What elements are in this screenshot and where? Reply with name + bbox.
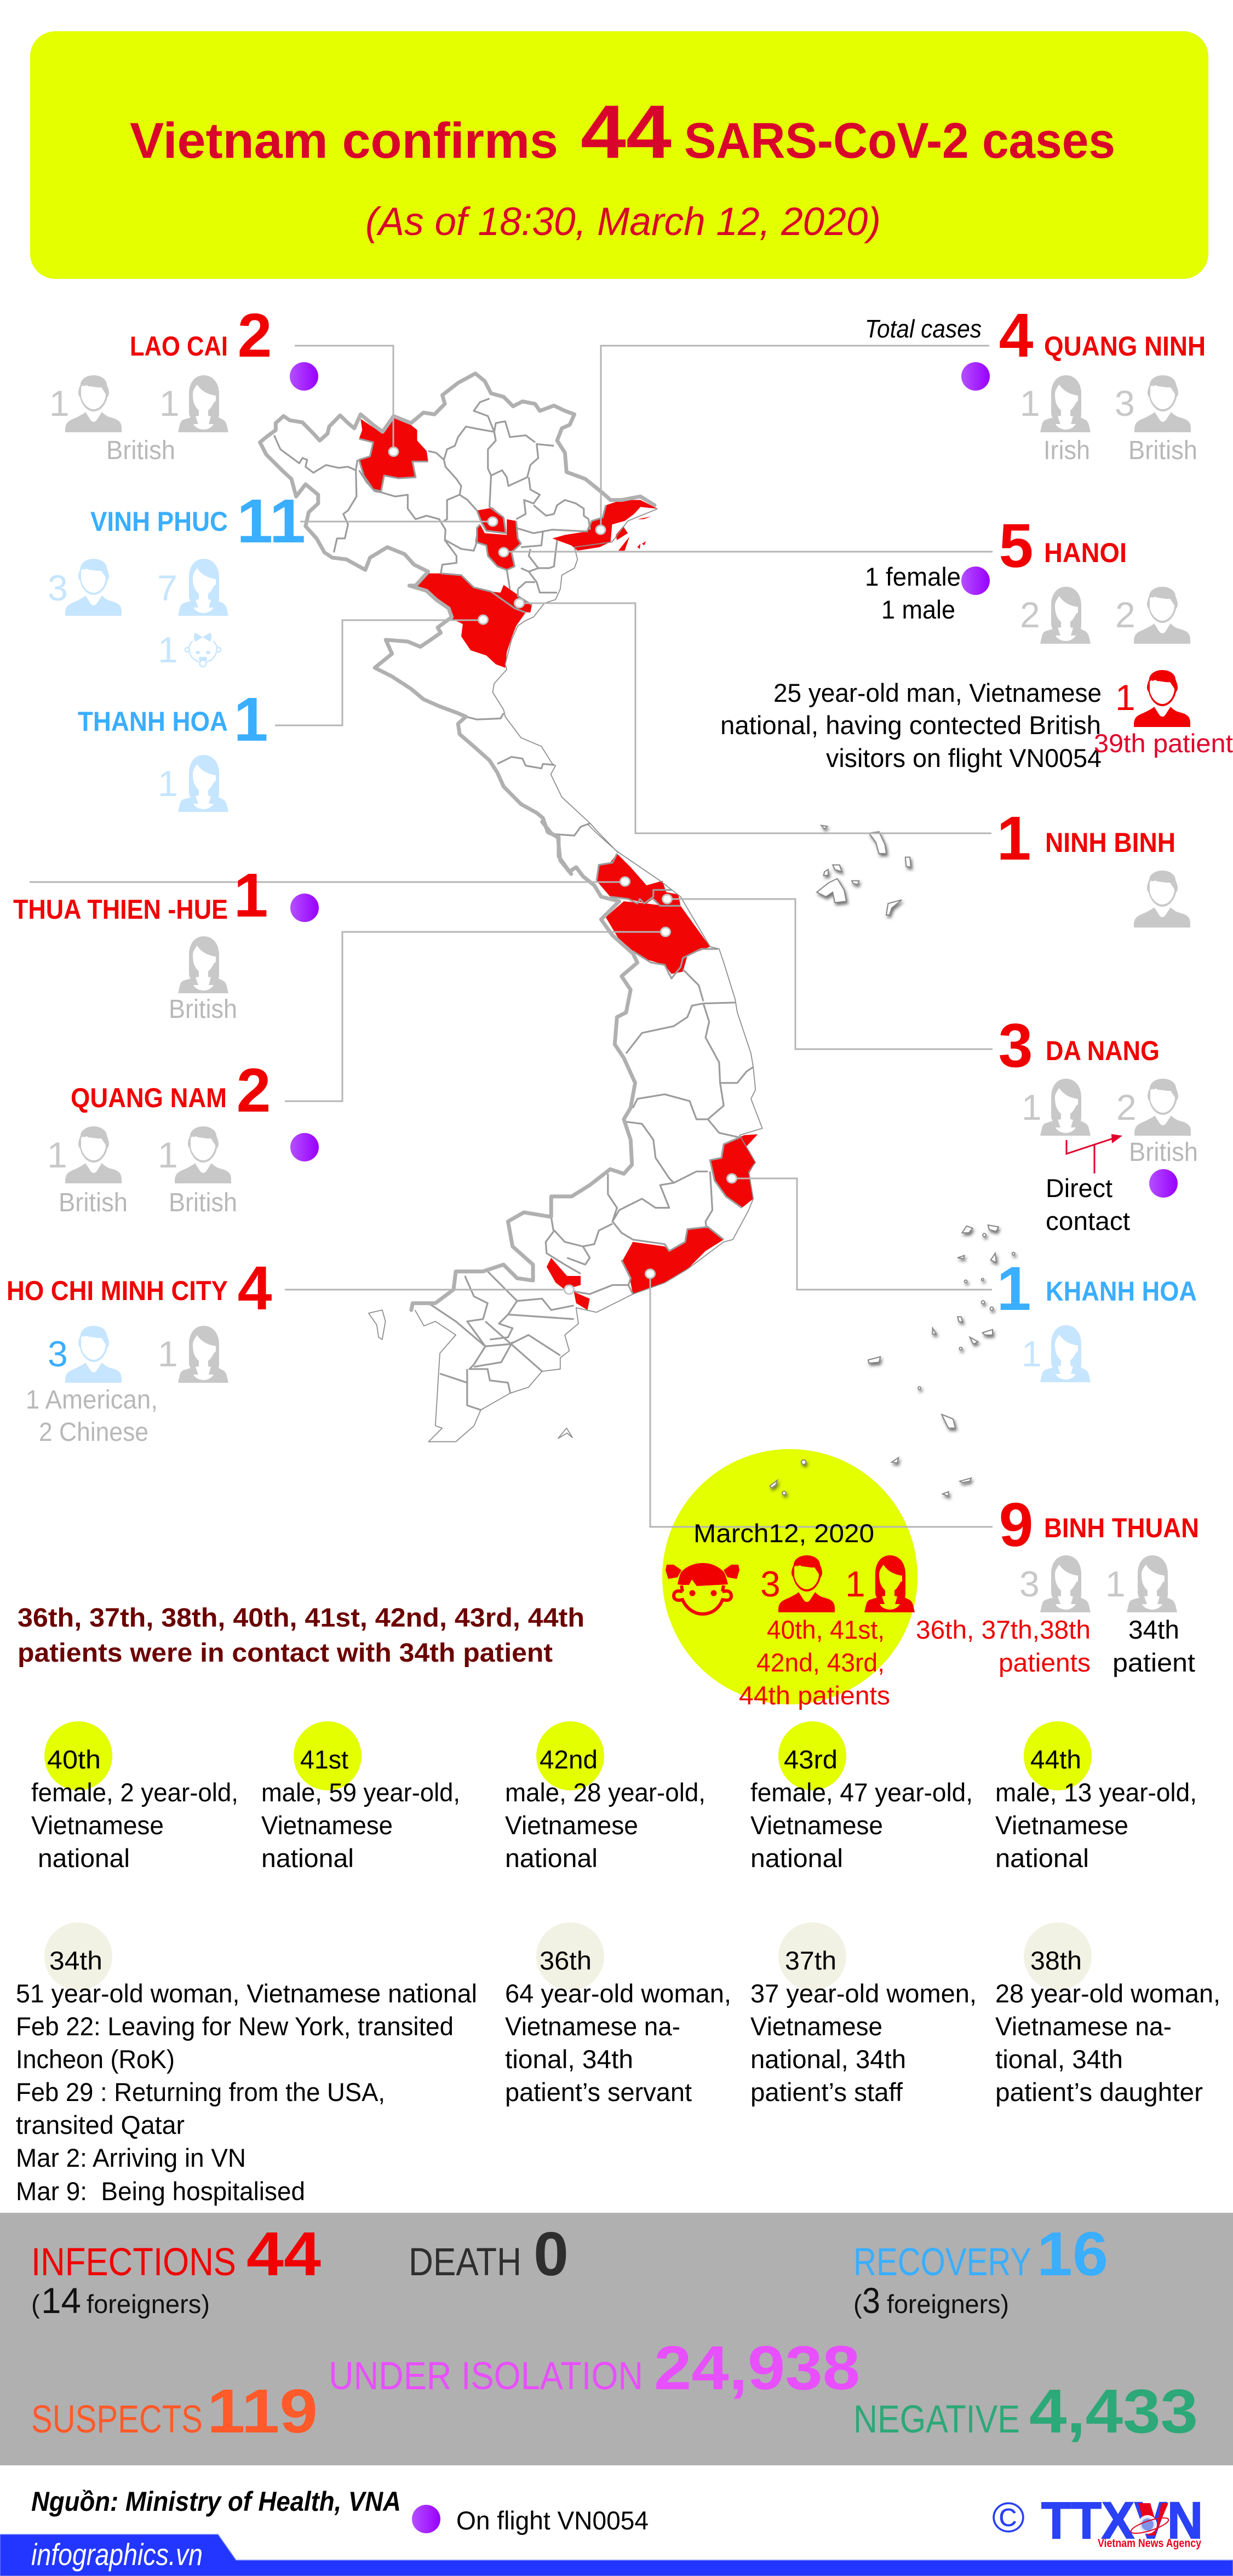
- southern land border: [411, 822, 638, 1310]
- panel: Khanh Hoa: [997, 1254, 1197, 1382]
- panel: Vinh Phuc: VINH PHUC: [90, 506, 228, 537]
- 38th patient: patient’s daughter: [995, 2077, 1203, 2106]
- negative: NEGATIVE: [853, 2398, 1020, 2441]
- panel: Ho Chi Minh City: HO CHI MINH CITY: [7, 1275, 228, 1306]
- deaths: [409, 2219, 569, 2288]
- date in circle: March12, 2020: [693, 1519, 874, 1548]
- 34th patient: Mar 2: Arriving in VN: [16, 2143, 246, 2172]
- title: Vietnam confirms: [130, 113, 558, 169]
- under isolation: [329, 2333, 860, 2402]
- panel: Quang Nam: QUANG NAM: [71, 1083, 227, 1113]
- flight marker: [961, 362, 990, 391]
- case count: 2: [238, 301, 272, 370]
- 37th patient: 37th: [785, 1946, 836, 1975]
- 39th patient icon: 1: [1115, 677, 1135, 718]
- flight marker: [961, 566, 990, 595]
- case count: 4: [999, 301, 1034, 370]
- 38th patient: 38th: [1030, 1946, 1082, 1975]
- 36th patient: [505, 1922, 731, 2106]
- northern provincial borders: [274, 399, 606, 835]
- suspects: SUSPECTS: [31, 2398, 203, 2441]
- under isolation: 24,938: [654, 2333, 860, 2402]
- 38th patient: Vietnamese na-: [995, 2012, 1172, 2041]
- logo: TTXVN Vietnam News Agency: Vietnam News Agency: [1098, 2537, 1201, 2550]
- panel: Thua Thien-Hue: [13, 861, 319, 1024]
- infections: 44: [246, 2219, 321, 2288]
- panel: Binh Thuan: 9: [999, 1490, 1033, 1559]
- southern map: [369, 822, 1015, 1496]
- panel: Khanh Hoa: 1: [997, 1254, 1031, 1323]
- flight marker: [290, 362, 318, 391]
- patient icons: [1022, 1079, 1191, 1136]
- red patient labels: [739, 1615, 1091, 1710]
- direct contact label: Direct: [1046, 1173, 1112, 1203]
- panel: Thua Thien-Hue: THUA THIEN -HUE: [13, 894, 228, 925]
- 43rd patient: [750, 1721, 973, 1873]
- suspects: 119: [207, 2377, 318, 2446]
- nationalities: 1 American,: [26, 1386, 158, 1415]
- footer band: [0, 2534, 1233, 2576]
- 41st patient: national: [261, 1844, 354, 1873]
- region name: DA NANG: [1046, 1035, 1160, 1066]
- red patient icons: 1: [845, 1564, 865, 1604]
- 36th patient: patient’s servant: [505, 2077, 692, 2106]
- Hoang Sa and Truong Sa archipelagos: [770, 826, 1015, 1496]
- 43rd patient: national: [750, 1844, 843, 1873]
- nationality: British: [1129, 1138, 1198, 1167]
- southern provincial borders: [428, 854, 753, 1410]
- gray patient icons: 3: [1019, 1564, 1040, 1604]
- negative: [853, 2377, 1198, 2446]
- 43rd patient: 43rd: [784, 1745, 838, 1774]
- deaths: DEATH: [409, 2241, 521, 2284]
- patient icons: 3: [48, 1333, 68, 1374]
- 44th patient: 44th: [1030, 1745, 1081, 1774]
- 42nd patient: 42nd: [540, 1745, 598, 1774]
- nationality: British: [106, 436, 175, 465]
- region name: NINH BINH: [1045, 827, 1175, 858]
- 39th patient icon: [1115, 670, 1190, 727]
- highlighted northern provinces: [359, 418, 658, 668]
- patient icons: 7: [157, 568, 177, 608]
- title: [130, 90, 1115, 174]
- northern coastline: [492, 509, 658, 853]
- direct contact label: contact: [1046, 1206, 1130, 1235]
- patient icons: 1: [159, 383, 180, 423]
- nationalities: [59, 1188, 237, 1217]
- patient icon: 1: [158, 763, 178, 804]
- northern map: [260, 374, 658, 874]
- header panel: [30, 31, 1208, 279]
- 40th patient: national: [38, 1844, 130, 1873]
- 34th patient: Feb 29 : Returning from the USA,: [16, 2077, 385, 2106]
- patient details: row 1: [31, 1721, 1197, 1873]
- connector lines: [30, 346, 993, 1527]
- nationalities: [1043, 436, 1197, 465]
- icon: child: [666, 1563, 739, 1614]
- 42nd patient: male, 28 year-old,: [505, 1778, 706, 1807]
- 34th patient: [16, 1922, 477, 2206]
- 42nd patient: national: [505, 1844, 598, 1873]
- panel: Ho Chi Minh City: [7, 1253, 272, 1447]
- title: SARS-CoV-2 cases: [684, 113, 1115, 169]
- 39th patient description: 25 year-old man, Vietnamese: [773, 678, 1102, 707]
- patient icon: [178, 936, 228, 993]
- patient icon: [1022, 1325, 1091, 1382]
- panel: Thanh Hoa: [78, 685, 268, 812]
- flight marker: [290, 1133, 319, 1161]
- under isolation: UNDER ISOLATION: [329, 2355, 643, 2398]
- recoveries: [853, 2219, 1108, 2288]
- patient icons: 1: [1020, 383, 1040, 423]
- patient icons: 2: [1020, 594, 1040, 635]
- contact note: [18, 1604, 584, 1668]
- nationalities: British: [59, 1188, 128, 1217]
- nationalities: Irish: [1043, 436, 1090, 465]
- region name: HANOI: [1044, 537, 1127, 568]
- deaths: 0: [534, 2219, 569, 2288]
- red patient labels: patients: [999, 1648, 1091, 1677]
- logo: TTXVN Vietnam News Agency: ©: [992, 2493, 1025, 2541]
- recovery foreigners: (: [853, 2289, 862, 2319]
- 44th patient: male, 13 year-old,: [995, 1778, 1197, 1807]
- highlight circle: March 12 cases: [662, 1449, 917, 1704]
- nationality: British: [169, 995, 237, 1024]
- panel: Hanoi: 5: [999, 511, 1033, 580]
- 38th patient: tional, 34th: [995, 2045, 1123, 2074]
- region name: BINH THUAN: [1044, 1513, 1199, 1543]
- patient icons: 1: [158, 629, 178, 670]
- 42nd patient: Vietnamese: [505, 1811, 638, 1840]
- patient icons: [49, 375, 228, 432]
- case count: 11: [237, 486, 306, 556]
- 40th patient: [31, 1721, 238, 1873]
- 36th patient: 36th: [540, 1946, 592, 1975]
- panel: Quang Nam: [47, 1056, 319, 1217]
- Phu Quoc and Con Dao islands: [369, 1310, 572, 1439]
- contact note: patients were in contact with 34th patient: [18, 1639, 553, 1668]
- panel: Lao Cai: LAO CAI: [130, 331, 228, 362]
- 34th patient: Mar 9: Being hospitalised: [16, 2177, 305, 2206]
- infections foreigners: foreigners): [87, 2289, 210, 2319]
- patient icons: [1020, 587, 1190, 644]
- red patient labels: 44th patients: [739, 1681, 890, 1710]
- 34th patient: Feb 22: Leaving for New York, transited: [16, 2012, 454, 2041]
- infections: [31, 2219, 321, 2288]
- gray patient icons: 1: [1105, 1564, 1126, 1604]
- recovery foreigners: [853, 2280, 1009, 2321]
- infections foreigners: 14: [41, 2280, 81, 2321]
- 40th patient: 40th: [47, 1745, 101, 1774]
- case count: 2: [237, 1056, 271, 1125]
- 39th patient label: 39th patient: [1094, 729, 1233, 758]
- recovery foreigners: 3: [862, 2280, 880, 2321]
- patient icons: 2: [1115, 594, 1135, 635]
- red patient labels: 36th, 37th,38th: [916, 1615, 1091, 1644]
- 41st patient: [261, 1721, 460, 1873]
- 36th patient: Vietnamese na-: [505, 2012, 680, 2041]
- infections foreigners: [31, 2280, 210, 2321]
- panel: Thanh Hoa: THANH HOA: [78, 706, 228, 737]
- flight marker: [1149, 1169, 1178, 1198]
- 34th patient label: [1112, 1615, 1195, 1677]
- subtitle: (As of 18:30, March 12, 2020): [365, 200, 881, 244]
- patient icons: [48, 559, 228, 670]
- header background: [30, 31, 1208, 279]
- footer band: infographics.vn: [31, 2537, 203, 2572]
- nationalities: [26, 1386, 158, 1447]
- highlighted southern provinces: [547, 854, 758, 1310]
- patient icons: [48, 1326, 228, 1383]
- 39th patient description: visitors on flight VN0054: [826, 743, 1102, 772]
- region name: QUANG NINH: [1044, 331, 1206, 362]
- 37th patient: [750, 1922, 977, 2106]
- logo: TTXVN Vietnam News Agency: TTXVN: [1041, 2492, 1203, 2550]
- panel: Da Nang: [999, 1011, 1198, 1235]
- patient icons: [1020, 375, 1191, 432]
- direct contact label: [1046, 1173, 1130, 1235]
- nationalities: British: [1128, 436, 1197, 465]
- 34th patient: 51 year-old woman, Vietnamese national: [16, 1979, 477, 2008]
- 34th patient: transited Qatar: [16, 2110, 185, 2139]
- 40th patient: female, 2 year-old,: [31, 1778, 238, 1807]
- red patient labels: 42nd, 43rd,: [756, 1648, 885, 1677]
- panel: Da Nang: 3: [999, 1011, 1033, 1080]
- infections foreigners: (: [31, 2289, 40, 2319]
- patient icons: 1: [1022, 1087, 1042, 1127]
- panel: Ninh Binh: 1: [997, 804, 1031, 873]
- southern coastline: [415, 824, 762, 1442]
- patient details: row 2: [16, 1922, 1220, 2206]
- icon: baby: [185, 633, 221, 667]
- panel: national statistics: [0, 2213, 1233, 2465]
- patient icons: 1: [49, 383, 70, 423]
- patient icons: 3: [48, 568, 68, 608]
- 44th patient: national: [995, 1844, 1089, 1873]
- 39th patient description: [720, 678, 1102, 772]
- 37th patient: Vietnamese: [750, 2012, 882, 2041]
- region name: KHANH HOA: [1046, 1276, 1197, 1307]
- 38th patient: 28 year-old woman,: [995, 1979, 1220, 2008]
- northern land border: [260, 374, 655, 874]
- case count: 1: [234, 861, 268, 930]
- 34th patient label: patient: [1112, 1648, 1195, 1677]
- 39th patient description: national, having contected British: [720, 711, 1101, 740]
- 41st patient: 41st: [300, 1745, 348, 1774]
- 42nd patient: [505, 1721, 706, 1873]
- patient icons: 2: [1116, 1087, 1137, 1127]
- 34th patient label: 34th: [1128, 1615, 1179, 1644]
- nationalities: 2 Chinese: [39, 1418, 148, 1447]
- panel: Binh Thuan: [666, 1490, 1199, 1710]
- flight note: 1 male: [881, 595, 955, 624]
- 43rd patient: Vietnamese: [750, 1811, 883, 1840]
- nationalities: British: [169, 1188, 237, 1217]
- panel: Quang Ninh: [865, 301, 1206, 465]
- contact note: 36th, 37th, 38th, 40th, 41st, 42nd, 43rd, 44th: [18, 1604, 584, 1633]
- map of Vietnam: [260, 374, 1015, 1496]
- 38th patient: [995, 1922, 1220, 2106]
- 36th patient: 64 year-old woman,: [505, 1979, 731, 2008]
- patient icons: 1: [158, 1135, 178, 1175]
- 41st patient: male, 59 year-old,: [261, 1778, 460, 1807]
- recoveries: 16: [1037, 2219, 1108, 2288]
- panel: Hanoi: [720, 511, 1233, 772]
- recoveries: RECOVERY: [853, 2241, 1031, 2284]
- red patient icons: 3: [760, 1564, 781, 1604]
- patient icons: 1: [47, 1135, 67, 1175]
- patient icon: [158, 755, 228, 812]
- gray patient icons: [1019, 1555, 1177, 1612]
- panel: Vinh Phuc: [48, 486, 306, 670]
- patient icon: 1: [1022, 1333, 1042, 1374]
- 41st patient: Vietnamese: [261, 1811, 393, 1840]
- 34th patient: 34th: [49, 1946, 102, 1975]
- 44th patient: Vietnamese: [995, 1811, 1128, 1840]
- source: Nguồn: Ministry of Health, VNA: [31, 2486, 401, 2517]
- province location dots: [389, 447, 736, 1294]
- panel: Ninh Binh: [997, 804, 1190, 928]
- infections: INFECTIONS: [31, 2241, 236, 2284]
- arrow: direct contact: [1066, 1134, 1122, 1173]
- red patient icons: [760, 1555, 915, 1612]
- case count: 1: [234, 685, 268, 754]
- flight note: 1 female: [865, 562, 961, 591]
- panel: Quang Ninh: Total cases: [865, 314, 982, 343]
- negative: 4,433: [1029, 2377, 1198, 2446]
- 37th patient: 37 year-old women,: [750, 1979, 977, 2008]
- patient icons: [47, 1126, 231, 1183]
- 40th patient: Vietnamese: [31, 1811, 164, 1840]
- 37th patient: patient’s staff: [750, 2077, 903, 2106]
- patient icons: 3: [1115, 383, 1135, 423]
- 36th patient: tional, 34th: [505, 2045, 633, 2074]
- recovery foreigners: foreigners): [887, 2289, 1009, 2319]
- patient icon: [1134, 871, 1190, 928]
- patient icons: 1: [158, 1333, 178, 1374]
- 37th patient: national, 34th: [750, 2045, 906, 2074]
- suspects: [31, 2377, 318, 2446]
- title: 44: [581, 90, 672, 174]
- legend: on flight VN0054: On flight VN0054: [456, 2506, 649, 2535]
- panel: Lao Cai: [49, 301, 318, 465]
- flight note: [865, 562, 961, 624]
- 43rd patient: female, 47 year-old,: [750, 1778, 973, 1807]
- case count: 4: [238, 1253, 272, 1323]
- red patient labels: 40th, 41st,: [767, 1615, 885, 1644]
- flight marker: [290, 894, 319, 922]
- 34th patient: Incheon (RoK): [16, 2045, 175, 2074]
- 44th patient: [995, 1721, 1197, 1873]
